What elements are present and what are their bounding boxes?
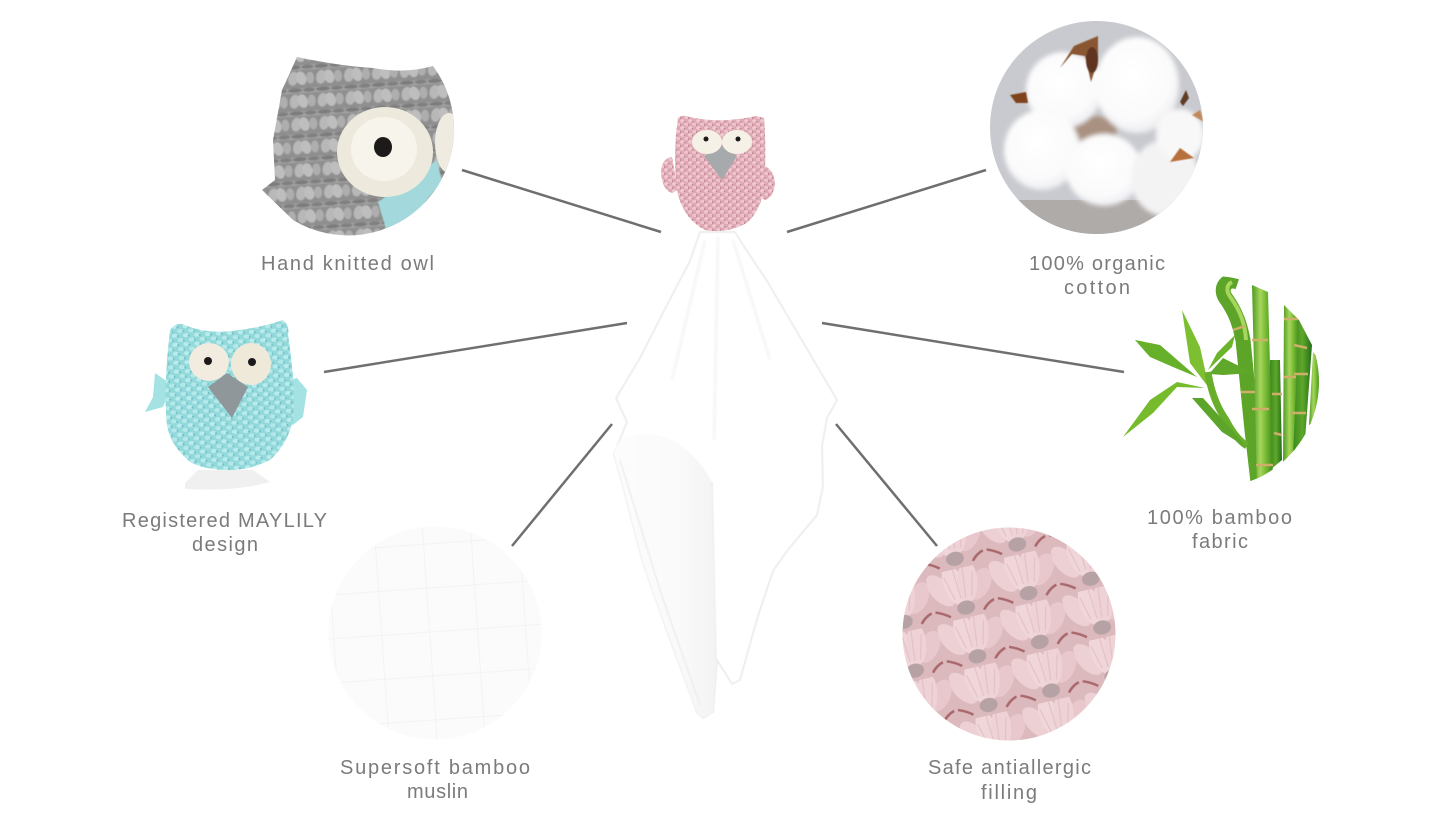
central product: owl comforter bbox=[614, 116, 837, 718]
cloth under mint owl bbox=[185, 470, 270, 490]
panel: bamboo bbox=[1123, 281, 1320, 484]
arrow: cloth to bamboo bbox=[822, 323, 1124, 372]
label: antiallergic filling bbox=[928, 757, 1091, 804]
label: hand knitted owl: Hand knitted owl bbox=[261, 253, 434, 275]
beak bbox=[208, 373, 248, 418]
panel: organic cotton close-up bbox=[985, 20, 1210, 240]
label: organic cotton: 100% organic bbox=[1029, 253, 1165, 275]
label: bamboo muslin bbox=[340, 757, 530, 803]
owl body bbox=[675, 116, 765, 231]
label: antiallergic filling: Safe antiallergic bbox=[928, 757, 1091, 779]
left wing bbox=[145, 373, 172, 412]
owl right wing bbox=[758, 165, 775, 200]
label: organic cotton: cotton bbox=[1064, 277, 1130, 299]
label: bamboo fabric bbox=[1147, 507, 1292, 553]
arrow: cloth to filling bbox=[836, 424, 937, 546]
body bbox=[166, 320, 294, 470]
label: antiallergic filling: filling bbox=[981, 782, 1037, 804]
label: bamboo muslin: Supersoft bamboo bbox=[340, 757, 530, 779]
arrow: owl to cotton bbox=[787, 170, 986, 232]
panel: hand knitted owl close-up bbox=[262, 57, 454, 236]
label: registered design bbox=[122, 510, 327, 556]
connector lines bbox=[324, 170, 1124, 546]
arrow: cloth to design bbox=[324, 323, 627, 372]
right wing bbox=[280, 378, 307, 425]
panel: antiallergic filling swatch bbox=[902, 528, 1116, 740]
eyes bbox=[189, 343, 271, 385]
label: bamboo muslin: muslin bbox=[407, 781, 468, 803]
label: organic cotton bbox=[1029, 253, 1165, 299]
owl left wing bbox=[661, 157, 678, 193]
arrow: owl to hand knitted bbox=[462, 170, 661, 232]
label: bamboo fabric: fabric bbox=[1192, 531, 1248, 553]
label: registered design: Registered MAYLILY bbox=[122, 510, 327, 532]
owl eyes bbox=[692, 130, 752, 154]
owl beak bbox=[704, 146, 737, 180]
panel: bamboo muslin swatch bbox=[328, 526, 542, 740]
arrow: cloth to muslin bbox=[512, 424, 612, 546]
label: bamboo fabric: 100% bamboo bbox=[1147, 507, 1292, 529]
muslin cloth bbox=[614, 232, 837, 718]
panel: mint owl bbox=[145, 320, 307, 490]
leaves bbox=[1123, 310, 1253, 447]
label: registered design: design bbox=[192, 534, 258, 556]
